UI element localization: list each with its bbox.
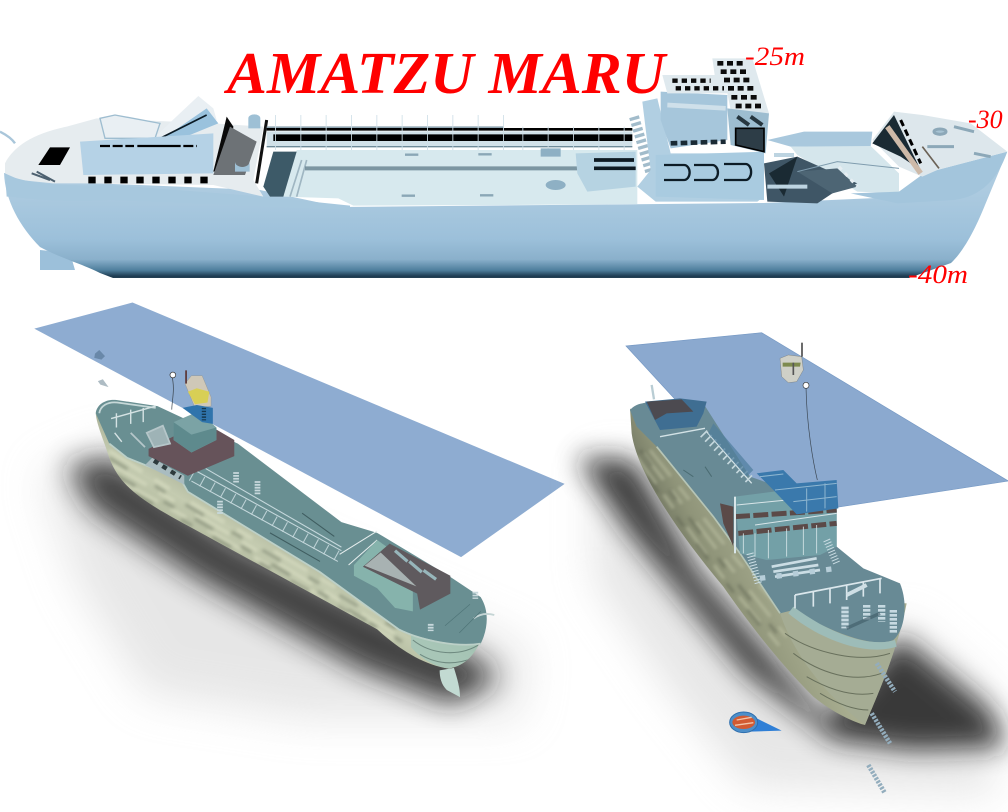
funnel (153, 96, 217, 138)
hull (630, 408, 907, 725)
icon: boat and buoy (780, 343, 809, 388)
foredeck structures (767, 132, 872, 147)
icon: boat and buoy (170, 370, 213, 424)
panel: right perspective view (577, 333, 1008, 793)
soft ground shadow (577, 457, 1007, 793)
panel: left perspective view (34, 302, 565, 719)
small debris markers (94, 350, 105, 360)
well deck (283, 150, 504, 206)
icon: rudder (40, 250, 75, 270)
icon: rudder (440, 668, 460, 697)
hull (4, 152, 1007, 278)
hull plating streaks (637, 450, 905, 725)
deck (96, 400, 487, 644)
depth label: -30: -30 (968, 105, 1003, 134)
panel: side view of the ship (0, 58, 1007, 278)
deckhouse grid (662, 58, 769, 113)
depth label: -25m: -25m (745, 42, 805, 71)
deck (630, 402, 905, 642)
mooring lines to surface (806, 387, 817, 480)
hull (96, 413, 486, 669)
bridge block (149, 427, 234, 476)
stern deckhouse (354, 540, 413, 611)
forward superstructure (735, 483, 837, 560)
title: AMATZU MARU (223, 40, 668, 106)
stern deckhouse (645, 398, 707, 430)
hull plating streaks (109, 451, 484, 669)
stern section (0, 96, 504, 210)
bow section (504, 58, 1007, 205)
superstructure (637, 98, 764, 202)
sea surface plane (34, 302, 565, 557)
winch gear (772, 558, 820, 577)
submerged blue deckhouse (757, 470, 838, 514)
sea surface plane (626, 333, 1008, 513)
deck fittings (220, 472, 475, 631)
anchor chain pieces (868, 663, 895, 793)
bow railing and bollards (795, 578, 893, 633)
railings (660, 428, 752, 483)
depth label: -40m: -40m (908, 260, 968, 289)
deck railings (191, 476, 338, 556)
soft ground shadow (41, 444, 527, 719)
icon: red locator pin (730, 712, 782, 733)
